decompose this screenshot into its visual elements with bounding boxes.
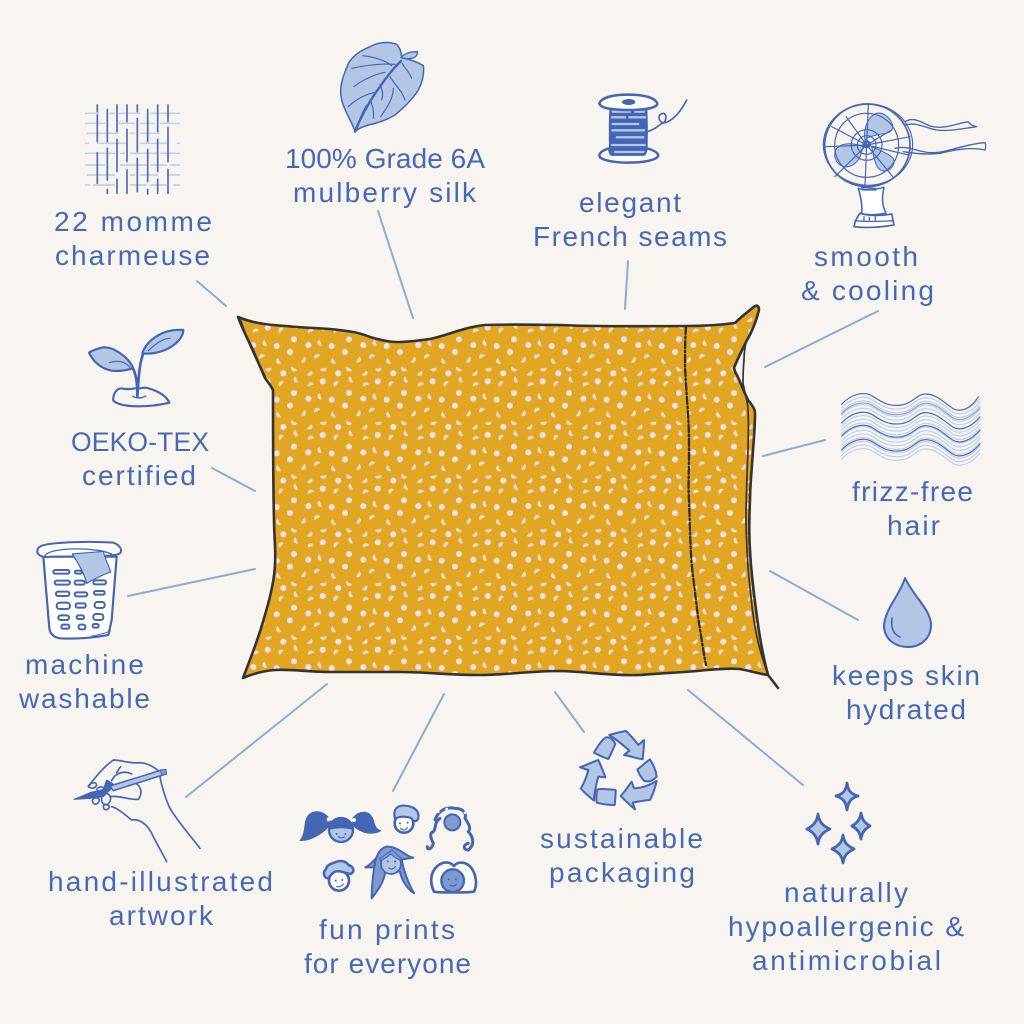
label: keeps skin hydrated: hydrated [846,694,966,725]
icon: recycling arrows [580,731,657,809]
label: fun prints for everyone: for everyone [304,948,471,979]
label: elegant French seams: French seams [533,221,727,252]
feature: hypoallergenic and antimicrobial [728,783,964,976]
label: smooth and cooling [801,241,934,306]
label: elegant French seams: elegant [579,187,681,218]
label: frizz-free hair: frizz-free [852,476,973,507]
face: pigtails [300,812,381,842]
label: 22 momme charmeuse: 22 momme [54,206,212,237]
icon: six children's faces [300,806,476,898]
face: bob hair [431,862,476,892]
feature: fun prints for everyone [300,806,476,979]
face: curly hair [427,808,473,850]
label: fun prints for everyone: fun prints [319,914,455,945]
label: machine washable [18,649,150,714]
label: 100% Grade 6A mulberry silk [285,143,485,208]
label: naturally hypoallergenic and antimicrobial: hypoallergenic & [728,911,964,942]
icon: laundry basket [37,542,121,639]
icon: mulberry leaf [341,42,424,132]
label: frizz-free hair: hair [887,510,940,541]
inner fold lines [241,321,768,675]
label: sustainable packaging: sustainable [540,823,703,854]
label: naturally hypoallergenic and antimicrobial: antimicrobial [752,945,941,976]
feature: 22 momme charmeuse [54,105,212,271]
label: machine washable: machine [25,649,144,680]
label: 22 momme charmeuse: charmeuse [55,240,210,271]
pillow outline [238,306,778,688]
label: naturally hypoallergenic and antimicrobial [728,877,964,976]
label: sustainable packaging: packaging [549,857,695,888]
feature: frizz-free hair [842,394,980,541]
label: 100% Grade 6A mulberry silk: 100% Grade 6A [285,143,485,174]
label: machine washable: washable [18,683,150,714]
label: keeps skin hydrated [832,660,980,725]
icon: sparkles [807,783,870,863]
icon: electric fan [823,104,986,227]
icon: water drop [884,578,931,647]
label: OEKO-TEX certified [71,427,209,491]
label: naturally hypoallergenic and antimicrobial: naturally [784,877,908,908]
icon: hand holding pencil [74,760,200,862]
label: sustainable packaging [540,823,703,888]
icon: hair waves [842,394,980,465]
feature: French seams [533,95,727,252]
pillowcase illustration [238,306,778,688]
face: short hair boy [394,806,419,833]
face: curly boy [324,861,353,891]
icon: woven fabric [85,105,180,194]
face: long hair [365,847,414,898]
feature: keeps skin hydrated [832,578,980,725]
label: hand-illustrated artwork [48,866,273,931]
feature: OEKO-TEX certified [71,330,209,491]
label: smooth and cooling: smooth [814,241,918,272]
pillow fabric with dotted print [238,306,768,678]
feature: sustainable packaging [540,731,703,888]
label: 100% Grade 6A mulberry silk: mulberry silk [293,177,477,208]
feature: hand-illustrated artwork [48,760,273,931]
icon: thread spool [599,95,687,163]
label: smooth and cooling: & cooling [801,275,934,306]
feature: machine washable [18,542,150,714]
label: frizz-free hair [852,476,973,541]
label: fun prints for everyone [304,914,471,979]
dashed seam stitching [685,327,706,665]
feature: smooth and cooling [801,104,986,306]
feature: mulberry silk [285,42,485,208]
leader lines [128,211,878,797]
label: elegant French seams [533,187,727,252]
label: hand-illustrated artwork: hand-illustrated [48,866,273,897]
label: OEKO-TEX certified: certified [82,460,196,491]
label: hand-illustrated artwork: artwork [109,900,214,931]
icon: sprout [89,330,183,406]
label: keeps skin hydrated: keeps skin [832,660,980,691]
label: 22 momme charmeuse [54,206,212,271]
label: OEKO-TEX certified: OEKO-TEX [71,427,209,457]
